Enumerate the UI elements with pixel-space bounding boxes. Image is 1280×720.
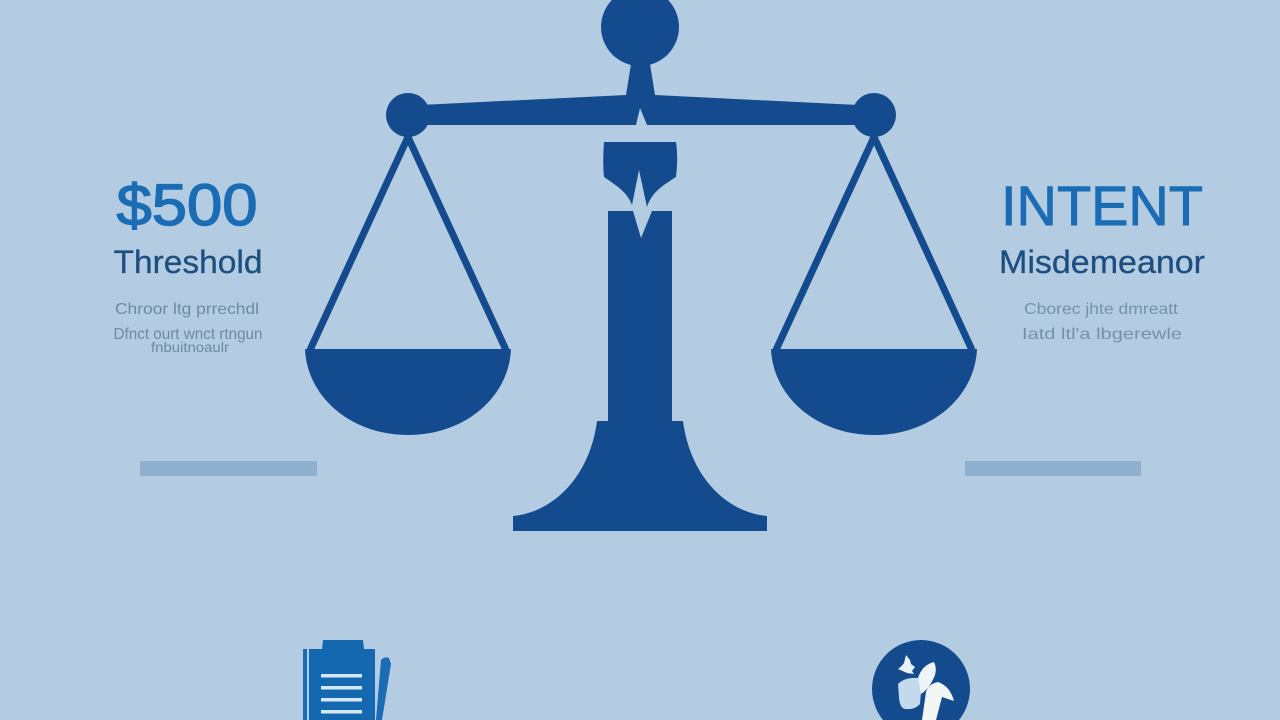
left pan [305,137,511,435]
label: Threshold: Threshold [114,244,262,280]
value: $500: $500 [116,173,258,238]
value: INTENT: INTENT [1001,174,1203,237]
description line 3: fnbuitnoaulr [151,339,229,355]
description line 2: Dfnct ourt wnct rtngun [114,326,262,343]
scale of justice [305,0,977,531]
icon: clipboard and pen [303,640,391,720]
right pan [771,137,977,435]
scale beam [420,64,858,125]
left text block [114,173,262,355]
scale top finial [601,0,679,66]
icon: circular emblem with figure [872,640,970,720]
right text block [999,174,1205,343]
right divider bar [965,461,1141,476]
column and base [513,211,767,531]
label: Misdemeanor: Misdemeanor [999,244,1205,280]
left divider bar [140,461,317,476]
description line 2: Iatd ltl'a lbgerewle [1022,326,1182,343]
left beam joint [386,93,430,137]
description line 1: Chroor ltg prrechdl [115,301,259,318]
right beam joint [852,93,896,137]
upper column piece [603,142,677,207]
description line 1: Cborec jhte dmreatt [1024,301,1179,318]
